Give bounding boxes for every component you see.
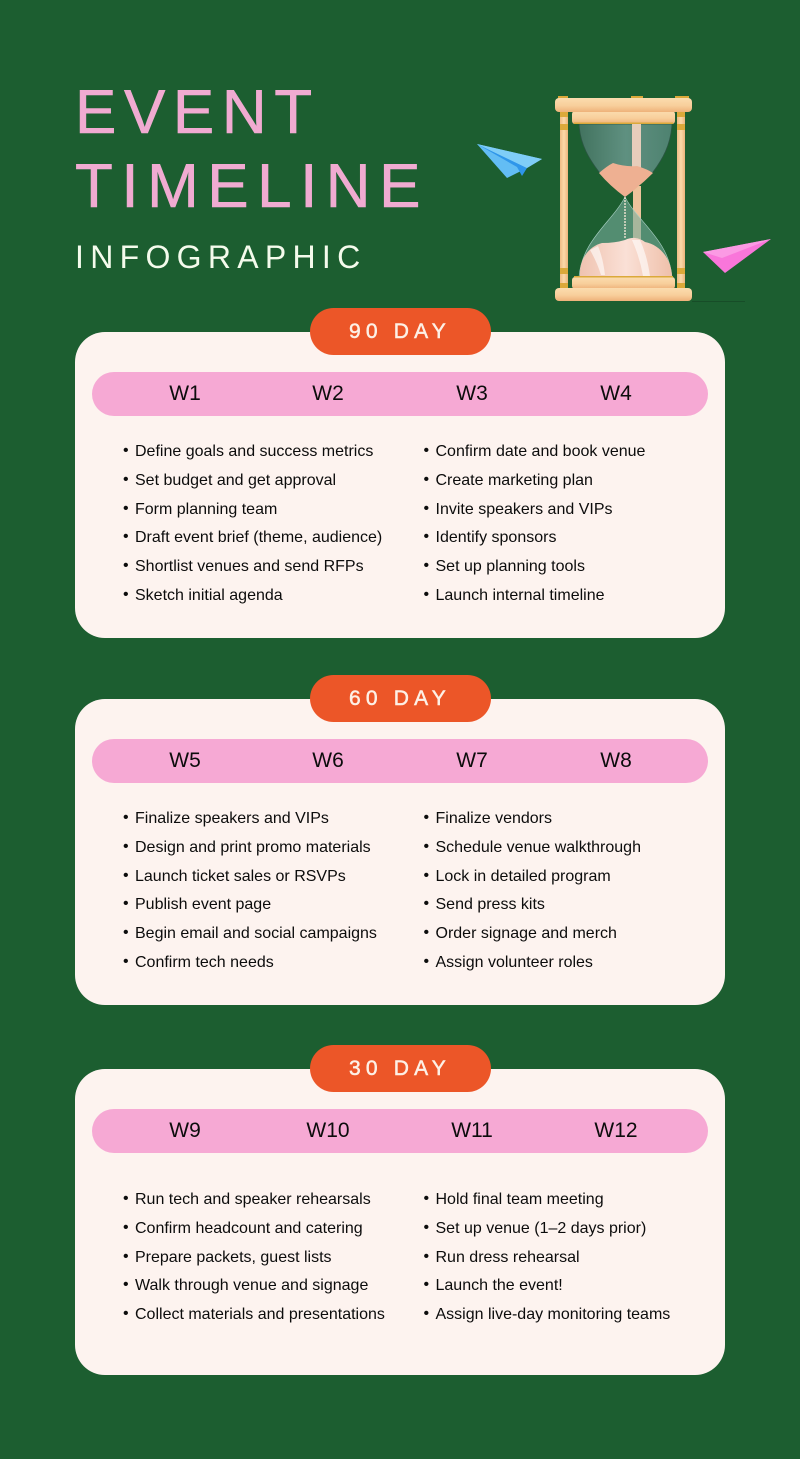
task list: W5 and W6: Confirm tech needs (135, 954, 274, 971)
title line: Event: EVENT (75, 78, 320, 146)
task list: W3 and W4: Confirm date and book venue (436, 443, 645, 460)
task list: W5 and W6: Finalize speakers and VIPs (135, 810, 329, 827)
week bar: W5 to W8: W8 (600, 749, 632, 772)
task list: W3 and W4: Launch internal timeline (436, 587, 604, 604)
upper glass bulb (579, 124, 672, 197)
badge: 90 day (310, 308, 491, 355)
task list: W7 and W8: Schedule venue walkthrough (436, 839, 641, 856)
task list: W11 and W12: Set up venue (1–2 days prior) (436, 1220, 646, 1237)
task list: W5 and W6: Publish event page (135, 896, 271, 913)
task list: W3 and W4 (424, 443, 645, 604)
week bar: W1 to W4: W4 (600, 382, 632, 405)
icon: hourglass (555, 96, 745, 302)
task list: W9 and W10: Walk through venue and signage (135, 1277, 368, 1294)
week bar: W9 to W12 (92, 1109, 708, 1153)
back post behind lower bulb (633, 186, 641, 246)
task list: W11 and W12: Assign live-day monitoring teams (436, 1306, 670, 1323)
task list: W1 and W2: Draft event brief (theme, audience) (135, 529, 382, 546)
week bar: W9 to W12: W12 (594, 1119, 638, 1142)
task list: W7 and W8: Assign volunteer roles (436, 954, 593, 971)
task list: W11 and W12 (424, 1191, 670, 1323)
week bar: W1 to W4: W2 (312, 382, 344, 405)
panel: 60 day (75, 699, 725, 1005)
task list: W3 and W4: Set up planning tools (436, 558, 585, 575)
panel: 30 day (75, 1069, 725, 1375)
week bar: W5 to W8: W7 (456, 749, 488, 772)
task list: W9 and W10: Prepare packets, guest lists (135, 1249, 332, 1266)
week bar: W9 to W12: W9 (169, 1119, 201, 1142)
task list: W3 and W4: Identify sponsors (436, 529, 556, 546)
week bar: W1 to W4: W3 (456, 382, 488, 405)
base shadow line (692, 300, 745, 302)
task list: W11 and W12: Launch the event! (436, 1277, 563, 1294)
task list: W1 and W2: Set budget and get approval (135, 472, 336, 489)
hourglass posts (560, 112, 685, 288)
upper sand (599, 163, 653, 197)
task list: W11 and W12: Hold final team meeting (436, 1191, 604, 1208)
lower glass bulb (579, 197, 672, 277)
badge: 30 day: 30 DAY (349, 1057, 451, 1080)
week bar: W9 to W12: W10 (306, 1119, 350, 1142)
week bar: W5 to W8 (92, 739, 708, 783)
badge: 90 day: 90 DAY (349, 320, 451, 343)
task list: W7 and W8: Finalize vendors (436, 810, 552, 827)
falling sand stream (624, 197, 626, 238)
task list: W7 and W8: Lock in detailed program (436, 868, 611, 885)
task list: W1 and W2: Shortlist venues and send RFPs (135, 558, 364, 575)
subtitle: Infographic: INFOGRAPHIC (75, 239, 367, 275)
task list: W9 and W10 (124, 1191, 385, 1323)
title: Event Timeline (75, 78, 429, 220)
week bar: W9 to W12: W11 (451, 1119, 493, 1142)
task list: W5 and W6: Design and print promo materials (135, 839, 371, 856)
badge: 60 day (310, 675, 491, 722)
task list: W5 and W6: Launch ticket sales or RSVPs (135, 868, 346, 885)
task list: W1 and W2: Define goals and success metrics (135, 443, 373, 460)
reflected post in upper bulb (632, 124, 641, 168)
week bar: W1 to W4 (92, 372, 708, 416)
task list: W9 and W10: Run tech and speaker rehearsals (135, 1191, 371, 1208)
lower sand pile (580, 238, 672, 276)
task list: W3 and W4: Invite speakers and VIPs (436, 501, 612, 518)
top cap (555, 96, 692, 124)
task list: W1 and W2: Form planning team (135, 501, 277, 518)
icon: blue paper plane (477, 144, 542, 178)
task list: W11 and W12: Run dress rehearsal (436, 1249, 580, 1266)
week bar: W5 to W8: W5 (169, 749, 201, 772)
task list: W1 and W2 (124, 443, 382, 604)
icon: pink paper plane (703, 239, 771, 273)
bottom base (555, 276, 692, 301)
task list: W5 and W6: Begin email and social campaigns (135, 925, 377, 942)
week bar: W5 to W8: W6 (312, 749, 344, 772)
task list: W7 and W8: Order signage and merch (436, 925, 617, 942)
week bar: W1 to W4: W1 (169, 382, 201, 405)
task list: W9 and W10: Confirm headcount and catering (135, 1220, 363, 1237)
task list: W5 and W6 (124, 810, 377, 971)
task list: W1 and W2: Sketch initial agenda (135, 587, 283, 604)
badge: 30 day (310, 1045, 491, 1092)
task list: W7 and W8: Send press kits (436, 896, 545, 913)
task list: W3 and W4: Create marketing plan (436, 472, 593, 489)
task list: W9 and W10: Collect materials and presentations (135, 1306, 385, 1323)
panel: 90 day (75, 332, 725, 638)
title line: Timeline: TIMELINE (75, 152, 429, 220)
illustration: hourglass and paper planes (477, 96, 771, 302)
badge: 60 day: 60 DAY (349, 687, 451, 710)
task list: W7 and W8 (424, 810, 641, 971)
